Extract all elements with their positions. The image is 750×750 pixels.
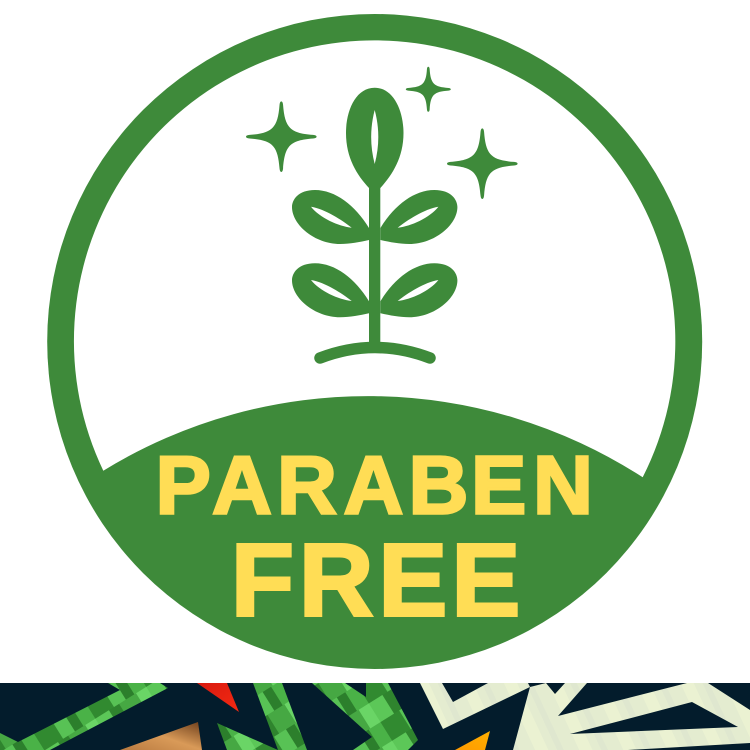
orange shard [455,731,490,750]
icon: sparkle left [246,101,317,172]
upper left leaf [292,190,369,244]
heading: free: FREE [231,522,520,638]
strip background [0,683,750,750]
cream shard [420,683,530,729]
brown shard [120,722,202,750]
top leaf [346,88,404,188]
green triangle [217,723,278,750]
green shard centre [253,683,307,750]
lower right leaf [380,263,457,317]
red shard [197,683,239,712]
icon: sparkle right [447,128,518,199]
cream large shard [513,683,750,750]
lower left leaf [292,263,369,317]
badge: paraben free [47,14,702,669]
badge ring and green hill [47,14,702,669]
upper right leaf [380,190,457,244]
green shard left [0,683,168,750]
icon: plant [292,88,457,358]
soil arc [320,348,430,358]
plant stem [369,183,380,346]
green shard right [312,683,418,750]
heading: paraben: PARABEN [156,439,593,532]
decorative mosaic strip [0,683,750,750]
white sky area [74,40,675,477]
icon: sparkle top right [406,67,451,112]
